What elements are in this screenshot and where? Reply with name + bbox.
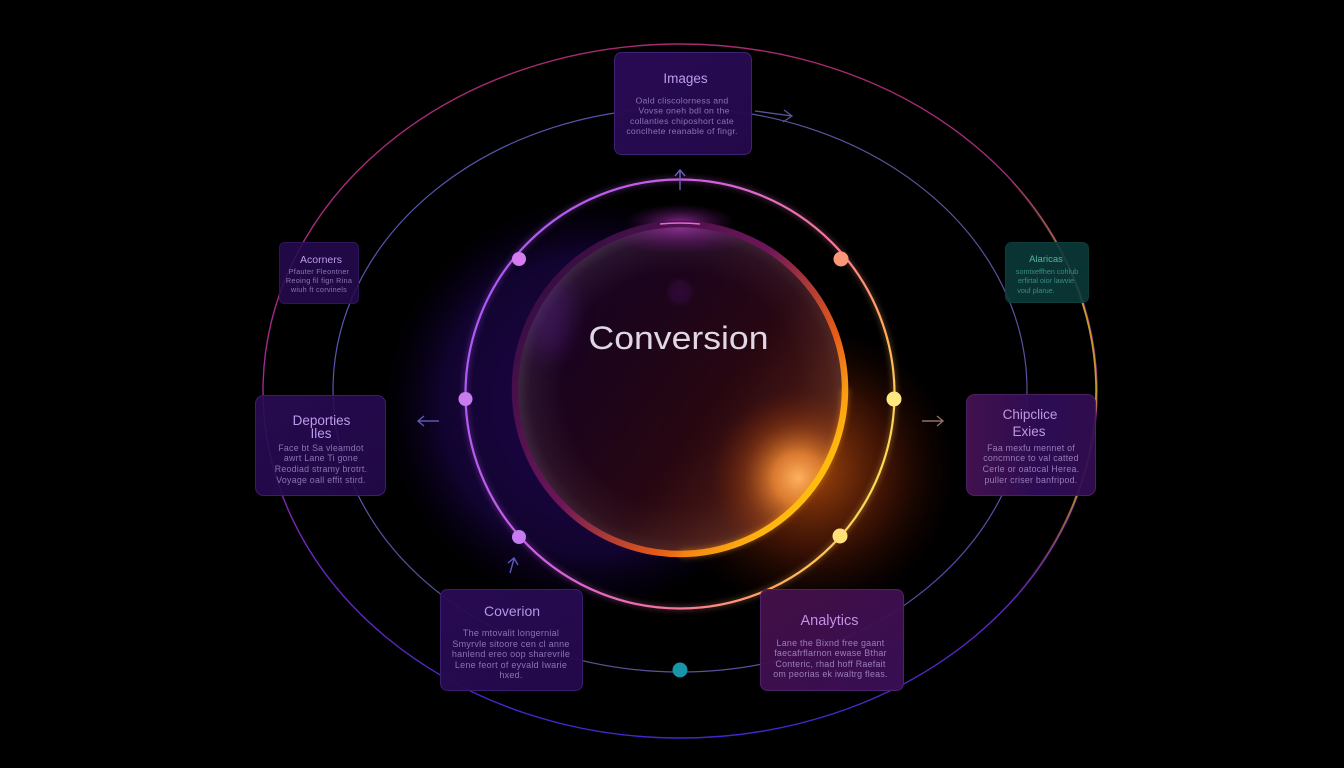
card: Deporties: Deporties [293, 413, 351, 428]
card: Acorners: Pfauter Fleontner [289, 267, 350, 276]
top highlight [660, 223, 700, 224]
card: Alaricas: erfirtal oior lawvie [1018, 276, 1074, 285]
card: Coverion: Smyrvle sitoore cen cl anne [452, 639, 570, 649]
card: Analytics: om peorias ek iwaltrg fleas. [773, 669, 888, 679]
card: Coverion: The mtovalit longernial [463, 628, 559, 638]
arrow: top right [755, 110, 792, 122]
central sphere [512, 220, 852, 562]
card: Alaricas: vouf plarue. [1017, 286, 1055, 295]
card: Chipclice Exies [966, 394, 1096, 496]
card: Chipclice Exies: concmnce to val catted [983, 453, 1079, 463]
card: Alaricas: somtxeffhen cohlub [1016, 267, 1078, 276]
card: Analytics: Analytics [800, 613, 859, 629]
card: Deporties [256, 396, 386, 496]
arrow: up to Images [675, 170, 685, 190]
card: Chipclice Exies: Cerle or oatocal Herea. [983, 464, 1079, 474]
card: Acorners: Acorners [300, 254, 342, 266]
card: Acorners: wiuh ft corvinels [290, 285, 347, 294]
ring nodes [458, 252, 902, 544]
card: Deporties: Iles [310, 426, 332, 441]
arrow: bottom left [508, 558, 518, 573]
arrow: left [418, 416, 439, 426]
card: Deporties: Face bt Sa vleamdot [278, 443, 364, 453]
card: Chipclice Exies: Chipclice [1003, 407, 1057, 422]
card: Analytics: faecafrflarnon ewase Bthar [774, 648, 887, 658]
card: Acorners [280, 242, 358, 304]
sphere rim [515, 224, 845, 554]
card: Alaricas [1006, 242, 1088, 302]
card: Coverion: Coverion [484, 603, 540, 619]
card: Chipclice Exies: puller criser banfripod. [984, 475, 1078, 485]
arrow: right [922, 416, 943, 426]
card: Analytics [760, 590, 904, 690]
card: Analytics: Conteric, rhad hoff Raefait [775, 659, 886, 669]
card: Images: collanties chiposhort cate [630, 116, 734, 126]
card: Deporties: awrt Lane Ti gone [284, 453, 358, 463]
card: Chipclice Exies: Exies [1012, 424, 1046, 439]
glow behind ring [385, 200, 955, 615]
card: Images: Vovse oneh bdl on the [638, 106, 730, 116]
card: Deporties: Reodiad stramy brotrt. [275, 464, 367, 474]
rim glow [680, 389, 845, 554]
card: Coverion: hxed. [499, 670, 523, 680]
card: Alaricas: Alaricas [1029, 254, 1063, 265]
card: Images: conclhete reanable of fingr. [626, 126, 738, 136]
middle orbit ellipse [333, 108, 1027, 672]
card: Images [614, 52, 752, 154]
card: Coverion: hanlend ereo oop sharevrile [452, 649, 570, 659]
card: Coverion [440, 590, 582, 690]
card: Acorners: Reoing fil fign Rina [286, 276, 353, 285]
card: Images: Oald cliscolorness and [636, 96, 728, 106]
card: Chipclice Exies: Faa mexfu mennet of [987, 443, 1075, 453]
node: teal [672, 662, 688, 678]
outer orbit ellipse [263, 44, 1097, 738]
card: Analytics: Lane the Bixnd free gaant [777, 638, 885, 648]
card: Images: Images [663, 71, 708, 86]
main ring [466, 180, 894, 608]
card: Coverion: Lene feort of eyvald Iwarie [455, 660, 567, 670]
title: Conversion [588, 320, 768, 356]
card: Deporties: Voyage oall effit stird. [276, 475, 366, 485]
